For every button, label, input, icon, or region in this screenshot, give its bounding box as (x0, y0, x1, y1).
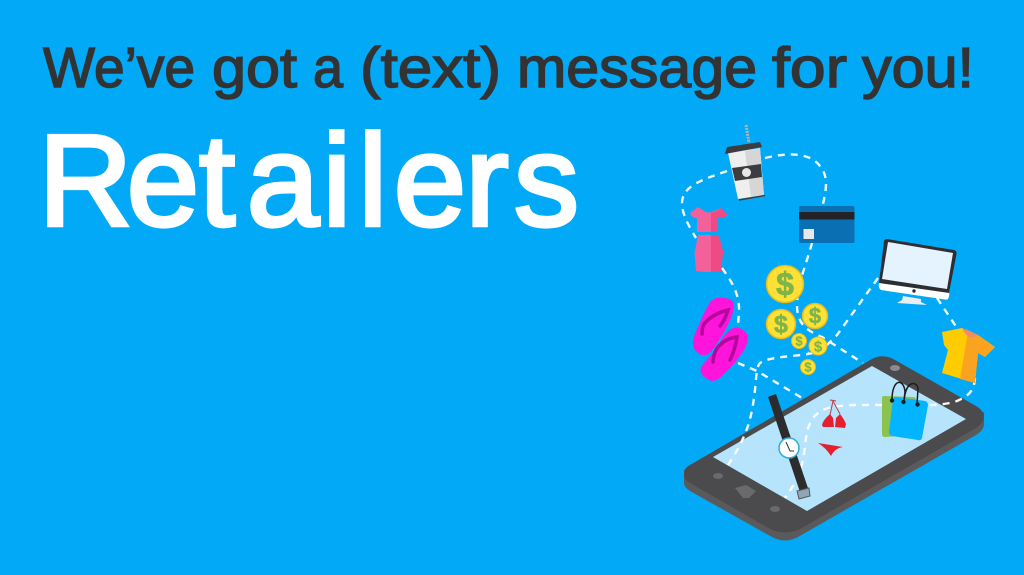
icon: shopping bag (882, 382, 928, 440)
icon: gold coins: $ (776, 266, 794, 302)
title: a (313, 36, 344, 99)
icon: credit card (799, 206, 854, 243)
icon: coffee cup (725, 125, 765, 200)
icon: gold coins: $ (774, 310, 788, 338)
phone screen (713, 366, 966, 511)
icon: gold coins: $ (814, 338, 823, 356)
icon: red bikini (818, 400, 846, 456)
heading: Retailers: Retailers (38, 107, 579, 253)
icon: wristwatch (768, 394, 810, 499)
flip flop bottom (700, 327, 748, 381)
icon: gold coins: $ (809, 304, 821, 328)
title: for (772, 36, 847, 99)
icon: pink dress (690, 207, 727, 272)
title (43, 36, 974, 99)
icon: t-shirt (942, 328, 995, 383)
title: you! (862, 36, 974, 99)
title: We’ve (43, 36, 195, 99)
icon: gold coins: $ (804, 360, 812, 374)
icon: flip flops (693, 298, 748, 381)
dashed route lines (682, 154, 975, 498)
icon: desktop monitor (879, 239, 957, 305)
icon: gold coins (766, 266, 828, 374)
icon: gold coins: $ (795, 334, 803, 348)
phone buttons (713, 365, 900, 512)
title: (text) (360, 36, 501, 99)
title: got (212, 36, 297, 99)
flip flop top (693, 298, 734, 355)
icon: smartphone (684, 356, 984, 540)
title: message (517, 36, 757, 99)
